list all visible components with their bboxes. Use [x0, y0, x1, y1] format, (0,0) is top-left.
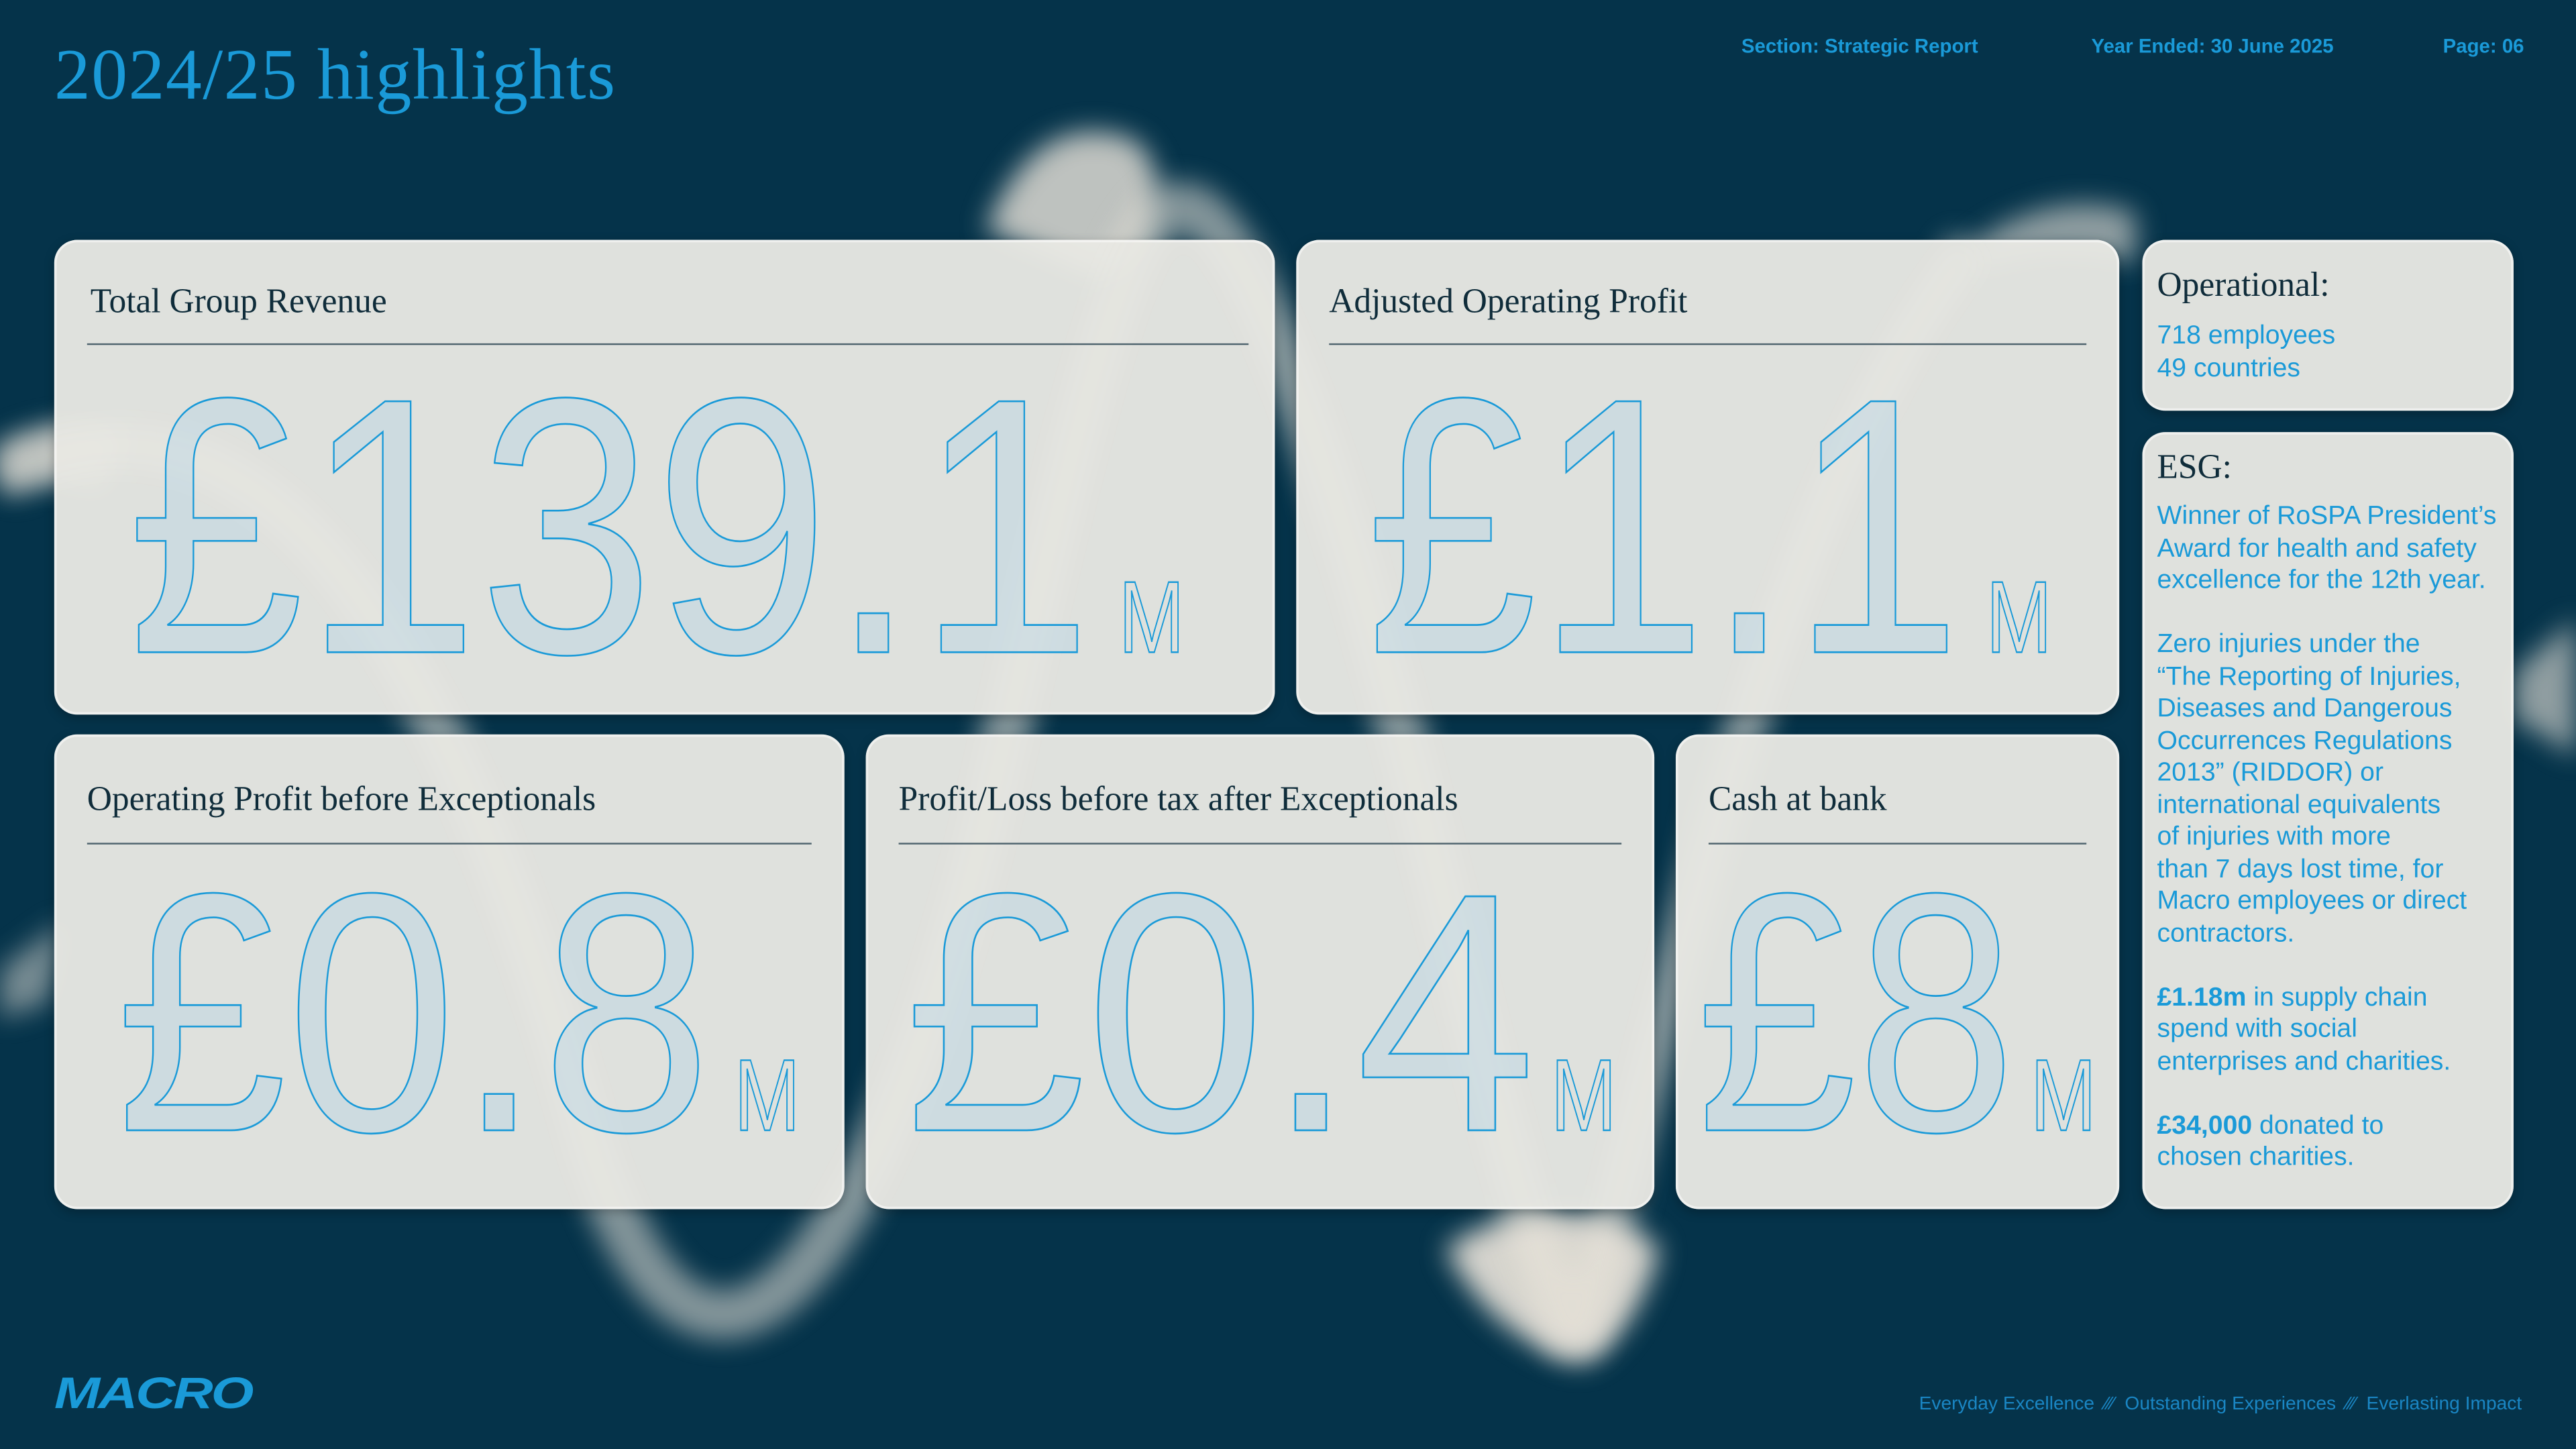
heading: ESG: — [2157, 447, 2232, 486]
text block: chosen charities. — [2157, 1143, 2355, 1171]
panel: adjusted operating profit — [1296, 240, 2119, 714]
text block: 2013” (RIDDOR) or — [2157, 759, 2383, 787]
heading: Operational: — [2157, 264, 2330, 304]
panel: profit/loss before tax — [866, 735, 1654, 1209]
text block: £34,000 donated to — [2157, 1112, 2383, 1139]
big number: £0.8 — [117, 823, 711, 1203]
panel: cash at bank — [1676, 735, 2119, 1209]
text block: Zero injuries under the — [2157, 631, 2420, 659]
big number: M — [1986, 561, 2052, 674]
big number: M — [2031, 1039, 2096, 1152]
big number: M — [735, 1039, 800, 1152]
heading: Cash at bank — [1709, 779, 1887, 818]
heading: Adjusted Operating Profit — [1329, 281, 1687, 321]
text block: excellence for the 12th year. — [2157, 567, 2486, 595]
header: page: Page: 06 — [2443, 34, 2524, 58]
big number: M — [1119, 561, 1185, 674]
big number: £8 — [1697, 823, 2016, 1203]
panel: total group revenue — [54, 240, 1275, 714]
text block: than 7 days lost time, for — [2157, 855, 2443, 883]
heading: Total Group Revenue — [91, 281, 387, 321]
panel: operational — [2142, 240, 2514, 411]
text block — [2157, 502, 2497, 1171]
text block: enterprises and charities. — [2157, 1047, 2451, 1075]
heading: Operating Profit before Exceptionals — [87, 779, 596, 818]
text block: of injuries with more — [2157, 823, 2391, 851]
tagline: Everyday Excellence ⁄⁄⁄ Outstanding Experiences ⁄⁄⁄ Everlasting Impact — [1919, 1395, 2522, 1415]
header: section: Section: Strategic Report — [1741, 34, 1978, 58]
text block: 49 countries — [2157, 354, 2300, 382]
logo: MACRO — [54, 1368, 252, 1417]
header: year: Year Ended: 30 June 2025 — [2092, 34, 2334, 58]
text block: Occurrences Regulations — [2157, 727, 2452, 755]
text block: “The Reporting of Injuries, — [2157, 663, 2461, 691]
text block: spend with social — [2157, 1015, 2357, 1043]
text block: Winner of RoSPA President’s — [2157, 502, 2497, 531]
big number: M — [1551, 1039, 1617, 1152]
text block: Macro employees or direct — [2157, 887, 2467, 915]
text block: Award for health and safety — [2157, 535, 2477, 563]
text block: international equivalents — [2157, 791, 2440, 819]
big number: £0.4 — [905, 823, 1536, 1203]
panel: operating profit before exceptionals — [54, 735, 845, 1209]
text block: contractors. — [2157, 919, 2294, 947]
text block: £1.18m in supply chain — [2157, 983, 2428, 1011]
heading: Profit/Loss before tax after Exceptionals — [899, 779, 1458, 818]
text block: Diseases and Dangerous — [2157, 695, 2453, 723]
text block — [2157, 322, 2335, 382]
panel: ESG — [2142, 432, 2514, 1209]
title: 2024/25 highlights — [54, 34, 616, 115]
text block: 718 employees — [2157, 322, 2335, 350]
